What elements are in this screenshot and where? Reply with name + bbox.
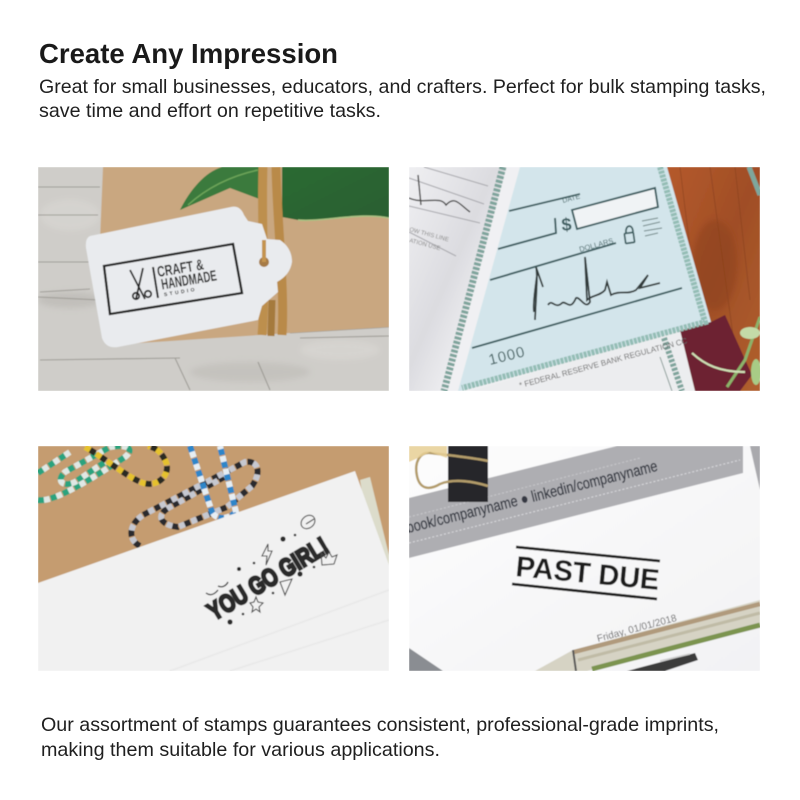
leaves xyxy=(180,167,262,210)
photo: craft gift tag with stamp: HANDMADE xyxy=(160,267,218,293)
photo: PAST DUE stamp on letterhead xyxy=(405,446,760,671)
closing text xyxy=(41,714,719,761)
photo: paper clips and YOU GO GIRL stamp xyxy=(38,446,389,671)
green clip xyxy=(38,446,130,500)
main check xyxy=(458,167,711,391)
stamp text: YOU GO GIRL! xyxy=(203,532,334,626)
photo: PAST DUE stamp on letterhead: PAST DUE xyxy=(514,551,661,597)
photo: PAST DUE stamp on letterhead: book/companyname ● linkedin/companyname xyxy=(405,458,659,537)
burgundy folder xyxy=(680,315,752,391)
photo: signed bank check: ATION USE xyxy=(408,238,441,252)
photo: signed bank check: DATE xyxy=(562,193,581,205)
back check left xyxy=(409,167,506,391)
lower document xyxy=(470,330,695,391)
photo: craft gift tag with stamp: STUDIO xyxy=(164,287,197,298)
binder clip xyxy=(448,446,488,502)
blue clip xyxy=(190,446,236,518)
pen xyxy=(535,600,760,671)
tag xyxy=(86,207,292,347)
cream page edge xyxy=(360,477,389,575)
plant xyxy=(692,317,760,387)
signature xyxy=(534,257,660,320)
corner sheet xyxy=(750,446,760,490)
photo: signed bank check: OW THIS LINE xyxy=(408,227,449,243)
stamp xyxy=(512,547,660,599)
closing text: Our assortment of stamps guarantees consistent, professional-grade imprints, xyxy=(41,714,719,736)
photo: signed bank check xyxy=(408,167,760,391)
photo: craft gift tag with stamp xyxy=(38,167,389,391)
intro text: Great for small businesses, educators, and crafters. Perfect for bulk stamping tasks, xyxy=(39,76,766,98)
kraft box xyxy=(100,167,389,345)
lock icon xyxy=(624,226,635,244)
photo: signed bank check: DOLLARS xyxy=(578,236,614,254)
intro text xyxy=(39,76,766,122)
doodles xyxy=(227,534,315,625)
photo: signed bank check: * FEDERAL RESERVE BANK REGULATION CC xyxy=(518,336,688,390)
intro text: save time and effort on repetitive tasks. xyxy=(39,100,381,122)
stamp imprint xyxy=(104,244,242,314)
white paper xyxy=(38,471,389,671)
photo: signed bank check: 1000 xyxy=(487,343,527,369)
photo: craft gift tag with stamp: CRAFT & xyxy=(156,256,205,281)
wood table xyxy=(666,167,760,391)
title: Create Any Impression xyxy=(39,38,338,69)
closing text: making them suitable for various applications. xyxy=(41,739,440,761)
grey band xyxy=(409,446,743,558)
yellow clip xyxy=(85,446,167,484)
check lines xyxy=(472,188,682,348)
black clip xyxy=(131,462,258,546)
date line: Friday, 01/01/2018 xyxy=(596,613,678,645)
photo: signed bank check: $ xyxy=(561,214,572,235)
twine xyxy=(262,167,264,335)
